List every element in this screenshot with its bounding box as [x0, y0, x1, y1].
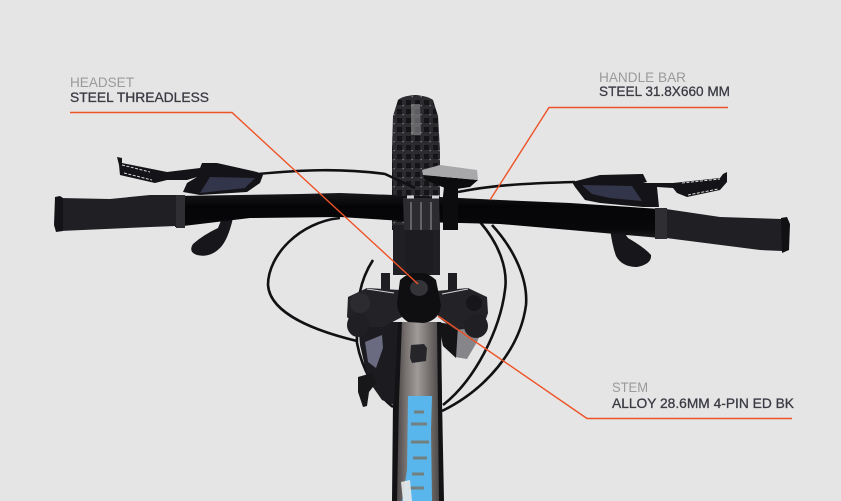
handle bar value: STEEL 31.8X660 MM: [599, 83, 730, 99]
label: handle bar: [490, 69, 730, 200]
handlebar: [175, 193, 660, 238]
front tyre: [392, 95, 440, 230]
bar stem clamp: [403, 198, 440, 230]
left grip: [60, 195, 176, 231]
left grip end cap: [54, 196, 63, 232]
steerer column: [405, 228, 433, 273]
head tube: [394, 322, 441, 501]
headset title: HEADSET: [70, 74, 134, 90]
right grip end cap: [781, 217, 790, 253]
left lever highlights: [122, 165, 152, 180]
logo gaps: [408, 412, 429, 488]
left shifter window: [200, 177, 255, 193]
right lower bracket: [453, 320, 487, 359]
right grip: [666, 209, 782, 251]
blue logo: [402, 396, 432, 501]
brake knobs: [350, 293, 370, 313]
cluster highlights: [365, 335, 383, 368]
label: headset: [70, 74, 418, 284]
stem leader line: [438, 316, 792, 418]
right shifter window: [582, 185, 642, 201]
label: stem: [438, 316, 795, 418]
right brake lever: [572, 172, 727, 207]
lower tyre edges: [393, 330, 443, 501]
stem wings: [347, 288, 402, 327]
bolts: [381, 273, 390, 291]
right gear paddle: [610, 228, 651, 267]
derailleur cluster: [358, 322, 398, 405]
right lever highlights: [682, 179, 720, 195]
stem value: ALLOY 28.6MM 4-PIN ED BK: [612, 395, 795, 411]
handle bar title: HANDLE BAR: [599, 69, 686, 85]
left gear paddle: [191, 218, 233, 256]
stem title: STEM: [612, 379, 648, 395]
white decal: [401, 480, 412, 501]
head badge: [410, 344, 427, 363]
tyre below stem: [393, 225, 440, 275]
headset leader line: [70, 112, 418, 284]
handle bar leader line: [490, 108, 728, 200]
computer body: [423, 175, 478, 190]
computer display: [422, 165, 478, 180]
stem wing highlights: [367, 289, 468, 294]
headset value: STEEL THREADLESS: [70, 89, 209, 105]
clamp bolts highlights: [407, 196, 439, 198]
cable lever: [358, 373, 376, 407]
stem cap: [397, 272, 441, 323]
head tube speckled edges: [392, 322, 444, 501]
bar collars: [176, 195, 185, 228]
brake and shift cables: [258, 170, 575, 411]
bicycle front view: [54, 95, 790, 501]
bell mount: [443, 178, 458, 230]
left brake lever: [117, 157, 263, 195]
tyre highlight: [411, 104, 421, 135]
